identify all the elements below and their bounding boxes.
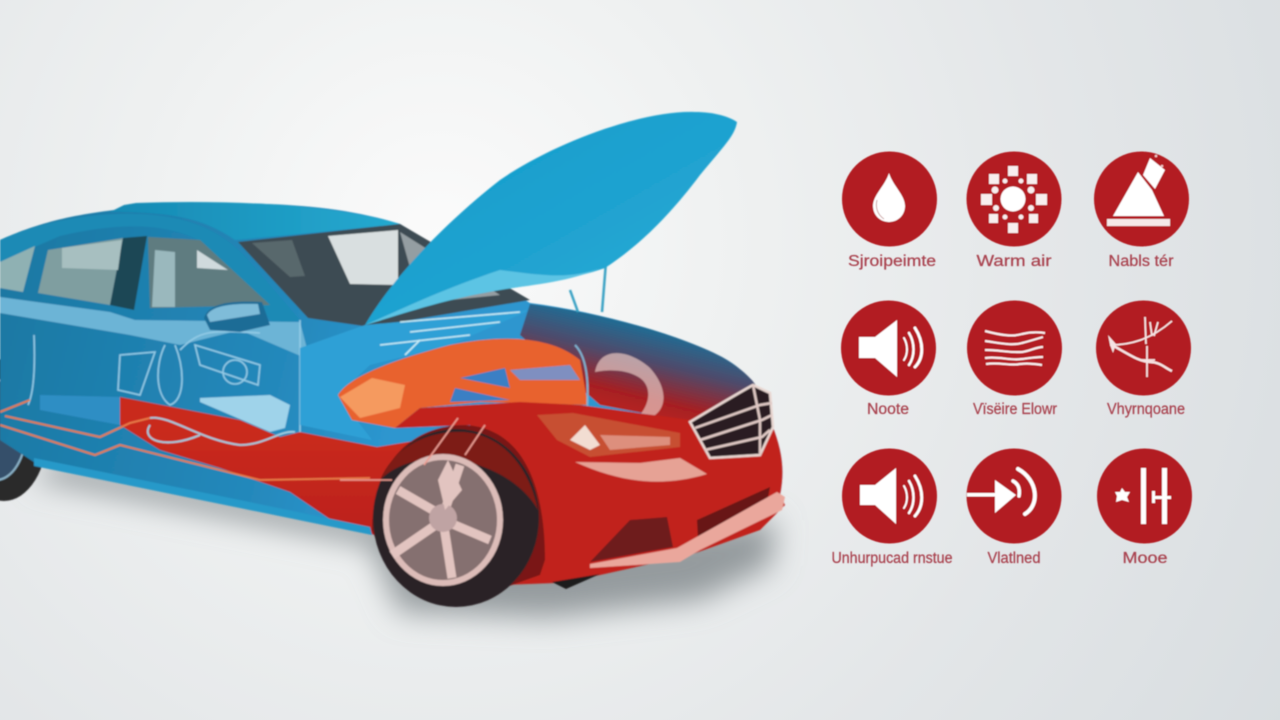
windshield — [238, 224, 530, 327]
side wiring — [0, 400, 370, 480]
label: Vïsëire Elowr: Vïsëire Elowr — [973, 401, 1057, 418]
rear wheel — [0, 359, 48, 501]
icon: gauge sliders — [1097, 448, 1192, 544]
front alloy rim — [386, 457, 500, 583]
overheating engine — [338, 339, 588, 428]
front door window — [148, 237, 270, 308]
front lip — [590, 492, 785, 568]
car body shell — [0, 203, 782, 565]
wheel cables — [340, 418, 485, 480]
wing mirror — [204, 302, 270, 332]
rear quarter window — [0, 246, 35, 292]
label: Noote: Noote — [867, 401, 909, 418]
headlight — [537, 413, 680, 457]
bonnet surface — [520, 304, 757, 422]
roof — [110, 202, 400, 240]
bonnet ghost ring — [595, 353, 664, 418]
door belt highlight — [0, 297, 310, 360]
label: Vlatlned: Vlatlned — [988, 550, 1040, 567]
symptom icon grid — [832, 152, 1192, 567]
underside — [552, 574, 600, 589]
icon: water drop — [842, 152, 937, 246]
lower door translucent panel — [40, 395, 120, 425]
icon: waves — [967, 300, 1062, 396]
engine bay blue — [300, 310, 530, 440]
label: Unhurpucad rnstue: Unhurpucad rnstue — [832, 550, 952, 567]
icon: speaker noise — [841, 300, 936, 396]
label: Warm air: Warm air — [976, 253, 1052, 270]
icon: arrow with sound wave — [966, 448, 1062, 544]
lower bumper vents — [590, 487, 770, 562]
label: Sjroipeimte: Sjroipeimte — [848, 253, 936, 270]
icon: vibration — [1096, 300, 1191, 396]
icon: warning triangle — [1094, 152, 1189, 246]
label: Nabls tér: Nabls tér — [1108, 253, 1174, 270]
icon: unexpected noise speaker — [842, 448, 937, 544]
wheel arch — [372, 425, 545, 600]
radiator grille — [690, 385, 773, 458]
icon: sun burst — [966, 152, 1062, 246]
label: Mooe: Mooe — [1122, 550, 1168, 567]
hood struts — [570, 262, 606, 312]
bumper highlight — [575, 458, 707, 482]
ground shadow — [30, 460, 775, 618]
rear door window — [38, 238, 123, 305]
roof frame band — [0, 214, 300, 325]
transparent mechanical interior — [28, 320, 305, 485]
engine block — [200, 395, 290, 432]
car illustration — [0, 112, 785, 607]
blue sill stripe — [34, 458, 372, 535]
red lower body — [120, 397, 470, 565]
open hood — [365, 112, 737, 325]
front tyre — [373, 429, 539, 607]
window pillar — [110, 236, 147, 310]
label: Vhyrnqoane: Vhyrnqoane — [1107, 401, 1185, 418]
red front wing — [395, 402, 785, 585]
